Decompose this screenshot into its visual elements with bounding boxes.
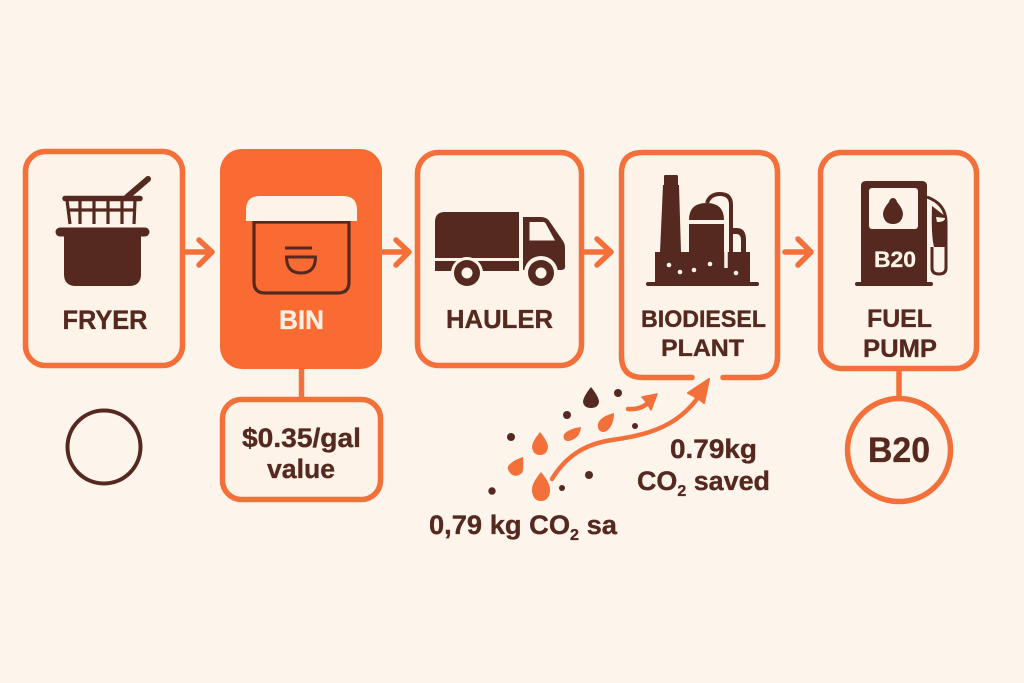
callout: value per gallon: $0.35/gal [242,423,361,453]
text: CO2 saved right: 0.79kg [670,434,757,464]
arrow: plant to pump [785,239,811,265]
icon: truck [435,212,565,290]
text: CO2 saved right: 2 [677,483,686,500]
label: fuel pump: FUEL [867,305,932,333]
label: biodiesel plant: BIODIESEL [641,306,766,333]
text: CO2 saved right: CO [637,466,678,496]
callout: value per gallon: value [267,454,335,484]
panel: hauler [418,152,582,366]
text: CO2 saved truncated: 0,79 kg CO [429,510,569,540]
empty circle [68,410,140,484]
label: fuel pump [863,305,937,363]
icon: factory [648,175,757,284]
icon: fryer basket and pot [60,179,148,286]
arrow: curved flow into plant [552,379,709,479]
label: fuel pump: PUMP [863,335,937,363]
arrow: small curved flow [628,394,657,410]
text: CO2 saved right [637,434,770,500]
panel: fuel pump [820,152,976,368]
label: biodiesel plant: PLANT [661,335,744,362]
icon: bin [246,196,357,293]
panel: fryer [26,152,182,366]
panel: biodiesel plant [622,152,778,378]
label: biodiesel plant [641,306,766,362]
text: CO2 saved truncated: sa [579,510,618,540]
connector: pump to B20 badge [896,371,902,398]
panel: bin [220,149,382,369]
arrow: bin to hauler [382,240,409,265]
text: CO2 saved right: saved [686,466,770,496]
label: bin: BIN [279,305,324,335]
icon: pump [857,181,946,284]
badge: B20: B20 [868,431,930,470]
arrow: hauler to plant [584,239,611,265]
callout: value per gallon [222,400,380,500]
badge: B20 [848,398,950,502]
arrow: fryer to bin [185,240,212,265]
connector: bin to value [299,369,304,398]
text: CO2 saved truncated: 2 [570,527,579,544]
oil droplets and particles [488,387,638,501]
icon: pump: B20 [874,247,916,272]
label: fryer: FRYER [62,305,148,335]
label: hauler: HAULER [446,304,553,334]
